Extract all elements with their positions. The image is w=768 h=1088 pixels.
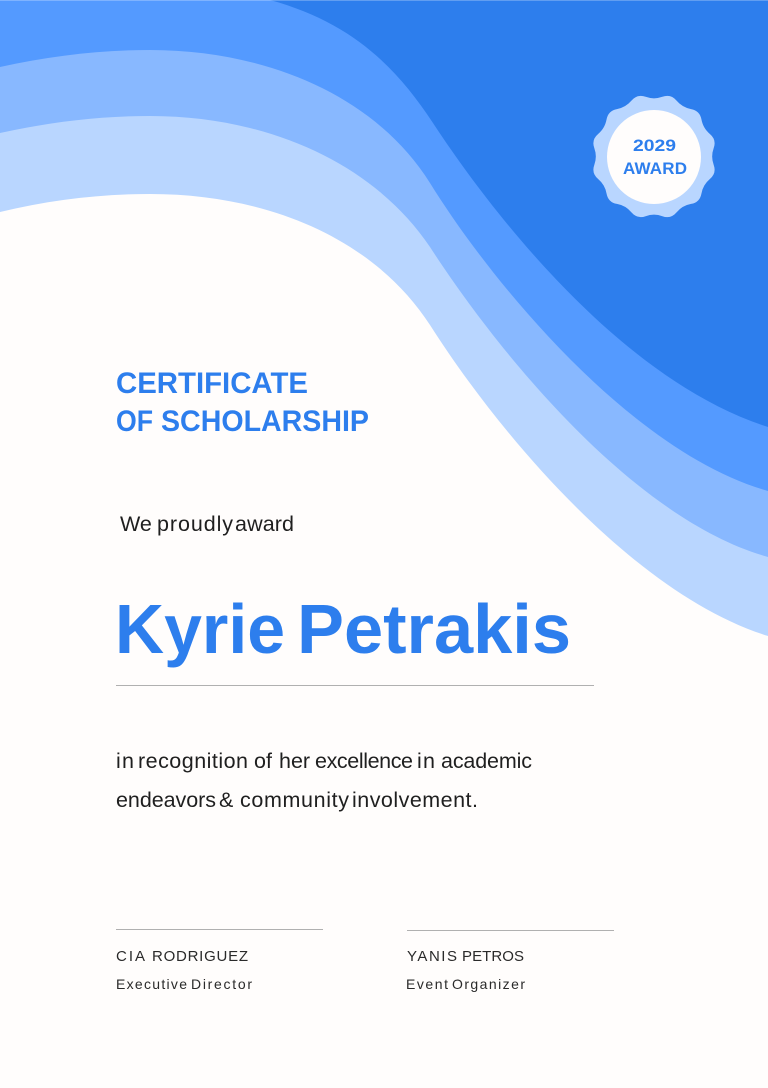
recognition text: excellence [315,749,413,773]
badge text: 2029 [633,136,676,155]
signature: Cia Rodriguez: CIA [116,948,145,965]
recognition text: academic [441,749,532,773]
recipient name: Kyrie [115,590,285,668]
badge inner circle [607,110,701,204]
recognition text: of [254,749,272,773]
recognition text: in [417,749,435,773]
signature: Cia Rodriguez: Executive [116,976,187,992]
name divider [116,685,594,686]
intro line: proudly [157,512,233,536]
recognition text: & [219,788,233,812]
badge scalloped seal [593,96,715,217]
signature: Yanis Petros: Organizer [452,976,525,992]
signature: Yanis Petros: PETROS [462,948,524,965]
signature: Cia Rodriguez: RODRIGUEZ [152,948,248,965]
signature: Yanis Petros [406,930,614,992]
signature: Yanis Petros: YANIS [407,948,457,965]
signature: Cia Rodriguez: Director [191,976,252,992]
badge: 2029 award [593,96,715,217]
badge text: AWARD [623,159,687,178]
recipient name: Petrakis [297,590,571,668]
intro line: award [235,512,294,536]
recognition text: her [279,749,310,773]
title: CERTIFICATE [116,367,308,400]
recognition text: endeavors [116,788,216,812]
recognition text: community [240,788,349,812]
title: SCHOLARSHIP [161,405,369,438]
intro line: We [120,512,152,536]
signature: Cia Rodriguez [116,929,323,992]
title: OF [116,405,153,438]
recognition text: recognition [138,749,248,773]
wave header background [0,0,768,636]
signature: Yanis Petros: Event [406,976,448,992]
recognition text: in [116,749,134,773]
recognition text: involvement. [352,788,478,812]
